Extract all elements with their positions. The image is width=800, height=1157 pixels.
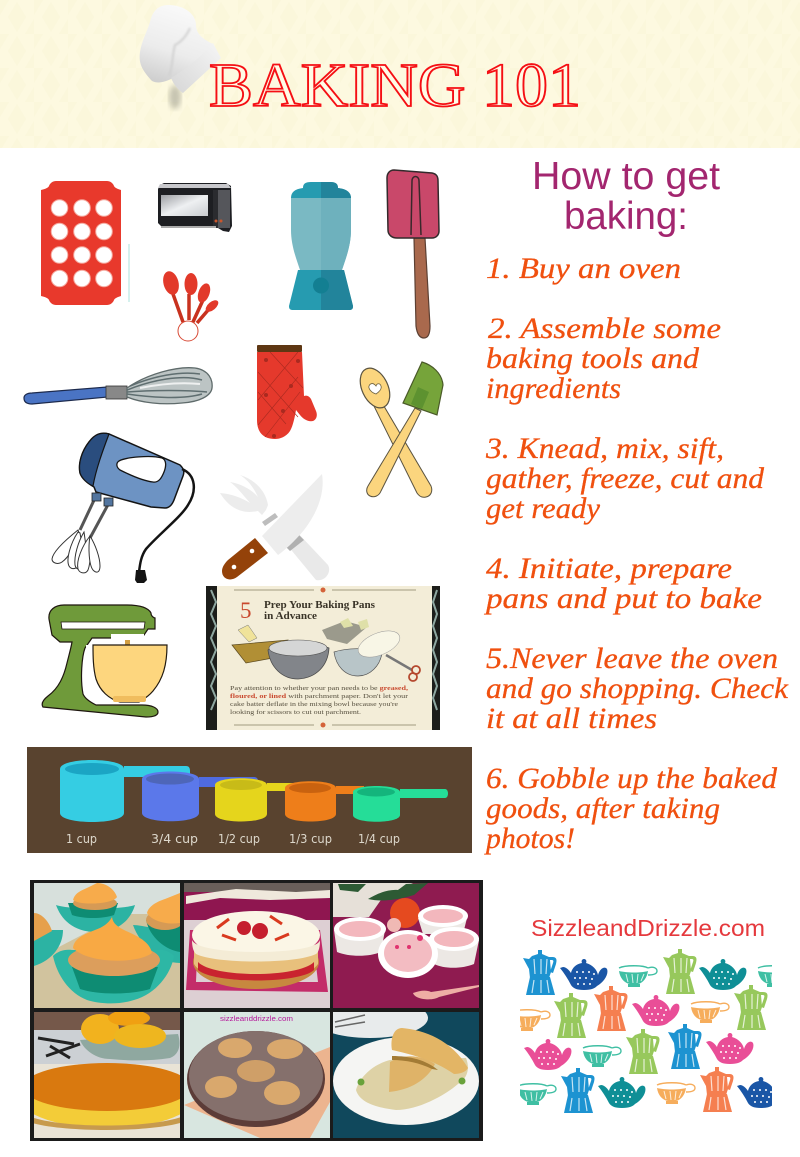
icon: measuring spoons <box>161 269 220 341</box>
panel: measuring cups: 1/4 cup <box>358 831 400 846</box>
icon: 1 cup <box>60 760 190 822</box>
text block: step 2: 2. Assemble some <box>488 312 721 345</box>
photo: cupcakes <box>34 883 184 1008</box>
title: BAKING 101 <box>209 52 581 120</box>
icon: crossed spoon and spatula <box>354 362 443 497</box>
icon: hand mixer <box>52 433 194 583</box>
panel: measuring cups <box>27 747 472 853</box>
text block: step 6: 6. Gobble up the baked <box>486 762 778 795</box>
panel: measuring cups: 1/2 cup <box>218 831 260 846</box>
icon: toaster oven <box>158 183 232 232</box>
panel: baking pans book page <box>206 586 440 730</box>
header banner <box>0 0 800 148</box>
icon: crossed fork and knife <box>220 474 329 580</box>
icon: blender <box>289 182 353 310</box>
panel: baking pans book page: Pay attention to whether your pan needs to be greased, <box>230 685 408 692</box>
icon: whisk <box>24 368 212 404</box>
heading: how to get baking: baking: <box>564 195 688 238</box>
panel: baking pans book page: 5 <box>240 598 252 623</box>
text block: step 3: get ready <box>486 492 601 525</box>
photo: pot pie <box>333 1012 479 1138</box>
text block: step 5 <box>486 642 789 735</box>
panel: measuring cups: 1 cup <box>66 831 97 846</box>
icon: oven mitt <box>257 345 317 439</box>
icon: 3/4 cup <box>142 772 258 821</box>
photo: rose pudding <box>333 883 479 1008</box>
text block: step 5: 5.Never leave the oven <box>486 642 778 675</box>
text block: step 6: goods, after taking <box>486 792 720 825</box>
icon: muffin pan <box>41 181 130 305</box>
text block: step 5: and go shopping. Check <box>486 672 789 705</box>
icon: 1/4 cup <box>353 786 448 822</box>
text block: step 2: baking tools and <box>486 342 700 375</box>
icon: chef hat <box>140 5 221 109</box>
text block: step 2: ingredients <box>486 372 621 405</box>
icon: 1/3 cup <box>285 781 364 822</box>
text block: step 4 <box>484 552 762 615</box>
photo: strawberry cake <box>184 883 330 1008</box>
text block: step 6: photos! <box>484 822 575 855</box>
panel: baked goods photo grid <box>22 880 483 1141</box>
text block: step 4: 4. Initiate, prepare <box>486 552 732 585</box>
photo: mango tart <box>34 1012 180 1138</box>
text block: step 6 <box>484 762 778 855</box>
heading: how to get baking <box>532 155 720 238</box>
pattern: teapots and cups <box>520 949 772 1113</box>
text block: step 4: pans and put to bake <box>484 582 762 615</box>
text block: step 2 <box>486 312 721 405</box>
logo text: sizzleanddrizzle.com: SizzleandDrizzle.com <box>531 915 765 941</box>
text block: step 3 <box>485 432 765 525</box>
panel: baking pans book page: cake batter deflate in the mixing bowl because you're <box>230 701 398 708</box>
panel: baking pans book page: Prep Your Baking Pans <box>264 600 375 611</box>
panel: measuring cups: 1/3 cup <box>289 831 332 846</box>
icon: stand mixer <box>42 605 167 717</box>
icon: spatula <box>387 170 439 338</box>
text block: step 3: gather, freeze, cut and <box>486 462 765 495</box>
icon: 1/2 cup <box>215 778 293 822</box>
panel: baking pans book page: in Advance <box>264 611 318 622</box>
heading: how to get baking: How to get <box>532 155 720 198</box>
panel: baking pans book page: looking for scissors to cut out parchment. <box>230 709 361 716</box>
panel: measuring cups: 3/4 cup <box>151 831 198 846</box>
panel: baking pans book page: floured, or lined with parchment paper. Don't let your <box>230 693 409 700</box>
text block: step 3: 3. Knead, mix, sift, <box>485 432 724 465</box>
photo: chocolate pear cake: sizzleanddrizzle.com <box>220 1016 293 1023</box>
text block: step 5: it at all times <box>486 702 657 735</box>
text block: step 1: 1. Buy an oven <box>486 252 681 285</box>
photo: chocolate pear cake <box>184 1012 330 1138</box>
